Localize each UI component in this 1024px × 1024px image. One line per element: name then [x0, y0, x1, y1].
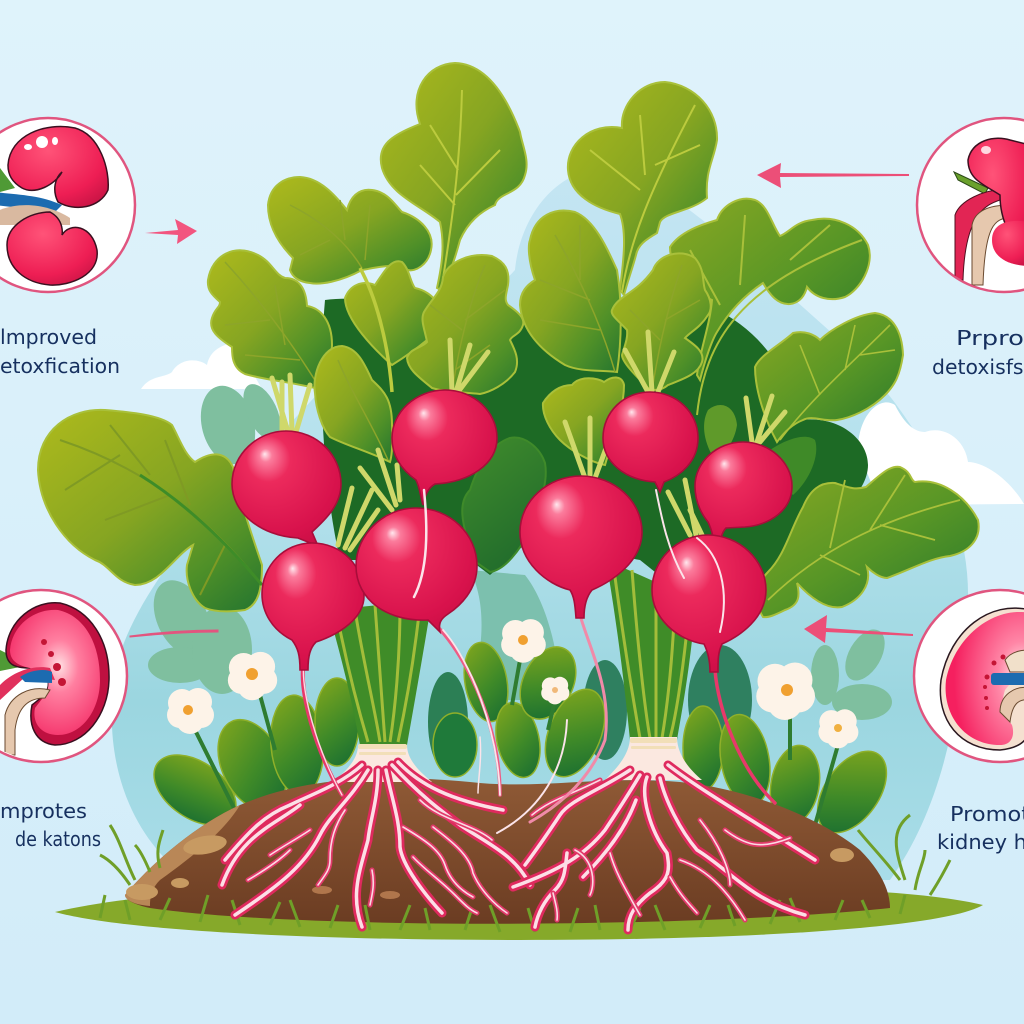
roots right — [513, 737, 815, 930]
label line 2: etoxfication — [0, 354, 120, 378]
flower 4 — [541, 677, 569, 704]
radish 6 — [603, 392, 698, 492]
white radish root lines — [414, 490, 724, 632]
radish 3 — [262, 543, 364, 670]
flower 6 — [818, 709, 858, 748]
radish tails — [303, 615, 775, 833]
flower stems — [195, 660, 838, 825]
callout: bottom left kidney — [0, 590, 218, 851]
flower 3 — [501, 619, 546, 663]
kidney illustration — [954, 138, 1024, 285]
label line 2: kidney h — [937, 830, 1024, 854]
callout: top right kidney — [757, 118, 1024, 379]
stem: upper left leaf — [360, 268, 392, 392]
leaf: far upper left — [208, 250, 332, 388]
arrow — [757, 163, 909, 188]
label: Prprot — [956, 326, 1024, 350]
radish 4 — [356, 508, 477, 632]
leaf: centre dark — [462, 438, 546, 572]
circle frame — [0, 590, 127, 762]
label: lmproved — [0, 325, 97, 349]
soil pebbles — [126, 832, 854, 900]
leaf: small far right — [704, 405, 737, 460]
line arrow — [130, 630, 218, 637]
radish 5 — [520, 476, 642, 618]
radish top stalks — [272, 332, 785, 550]
arrow — [145, 219, 197, 244]
radish 1 — [232, 431, 341, 546]
radish bunch right: stems — [606, 560, 696, 740]
background blob — [112, 169, 968, 880]
leaf: right wide — [670, 199, 870, 415]
leaf: centre — [407, 255, 523, 394]
circle frame — [914, 590, 1024, 762]
circle frame — [917, 118, 1024, 292]
leaf: inner right — [612, 253, 711, 390]
leaf: big right — [756, 467, 979, 617]
leaf: upper left — [268, 177, 432, 284]
leaf: big left — [38, 410, 262, 611]
flower 2 — [228, 652, 277, 700]
leaf: top centre — [381, 63, 527, 290]
arrow — [804, 615, 913, 643]
leaf: far right — [755, 313, 903, 442]
leaf: middle right — [520, 211, 621, 372]
callout: top left kidney — [0, 118, 197, 378]
leaf: small right centre — [543, 377, 624, 465]
foliage — [38, 63, 979, 617]
cloud left — [141, 342, 262, 389]
kidney illustration — [0, 603, 109, 755]
label: Promot — [950, 802, 1024, 826]
radish 8 — [652, 535, 766, 672]
cloud right — [858, 402, 1024, 505]
faded background foliage — [142, 378, 893, 760]
label line 2: de katons — [15, 827, 101, 851]
low foliage plants — [141, 638, 901, 845]
flower 1 — [167, 688, 214, 734]
kidney illustration — [940, 608, 1024, 750]
leaf: small right lower — [770, 437, 816, 495]
radishes — [232, 390, 792, 672]
soil mound — [125, 778, 890, 924]
radish bunch left: stems — [328, 600, 432, 745]
kidney illustration — [0, 127, 108, 285]
roots left — [222, 745, 530, 927]
root collars — [358, 738, 677, 755]
soil tan rim — [125, 805, 240, 906]
leaf: top right — [568, 82, 717, 295]
label: mprotes — [0, 799, 87, 823]
radish 2 — [392, 390, 497, 505]
flowers — [167, 619, 858, 748]
radish 7 — [695, 442, 792, 550]
circle frame — [0, 118, 135, 292]
callout: bottom right kidney — [804, 590, 1024, 854]
ground strip — [55, 885, 983, 940]
leaf: small left centre — [314, 346, 392, 462]
grass tufts — [100, 815, 950, 932]
flower 5 — [756, 662, 815, 720]
dark foliage mass behind radishes — [322, 296, 868, 610]
leaf: inner left — [345, 261, 435, 365]
